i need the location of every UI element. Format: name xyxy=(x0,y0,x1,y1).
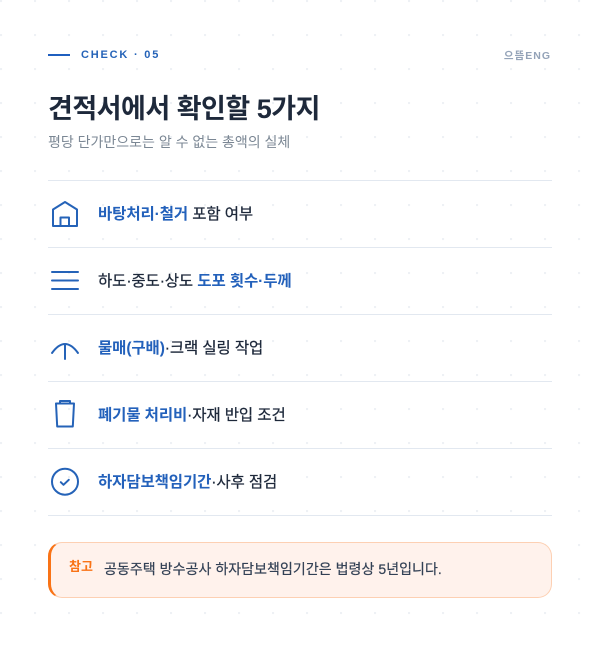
text: item 2: 하도·중도·상도 도포 횟수·두께 xyxy=(98,273,292,290)
icon: check circle xyxy=(51,468,79,496)
icon: three layers xyxy=(51,271,79,290)
subtitle: 평당 단가만으로는 알 수 없는 총액의 실체 xyxy=(48,134,290,150)
item 5: warranty xyxy=(51,468,277,496)
item 2: coating count xyxy=(51,271,292,290)
item 3: crack sealing xyxy=(51,340,263,360)
text: item 4: 폐기물 처리비·자재 반입 조건 xyxy=(98,407,286,424)
icon: umbrella arc xyxy=(51,343,79,360)
icon: bin xyxy=(55,400,75,428)
item 1: base treatment xyxy=(52,201,253,227)
title: 견적서에서 확인할 5가지 xyxy=(48,94,320,124)
brand label: 으뜸ENG xyxy=(504,50,551,62)
callout text: 공동주택 방수공사 하자담보책임기간은 법령상 5년입니다. xyxy=(104,561,442,577)
text: item 1: 바탕처리·철거 포함 여부 xyxy=(98,206,253,223)
text: item 5: 하자담보책임기간·사후 점검 xyxy=(98,474,277,491)
callout label: 참고 xyxy=(69,559,93,574)
eyebrow accent line xyxy=(48,54,70,56)
callout: note xyxy=(48,542,552,598)
text: item 3: 물매(구배)·크랙 실링 작업 xyxy=(98,340,263,357)
item 4: waste disposal xyxy=(55,400,286,428)
eyebrow label: CHECK · 05 xyxy=(81,49,160,61)
icon: house xyxy=(52,201,78,227)
